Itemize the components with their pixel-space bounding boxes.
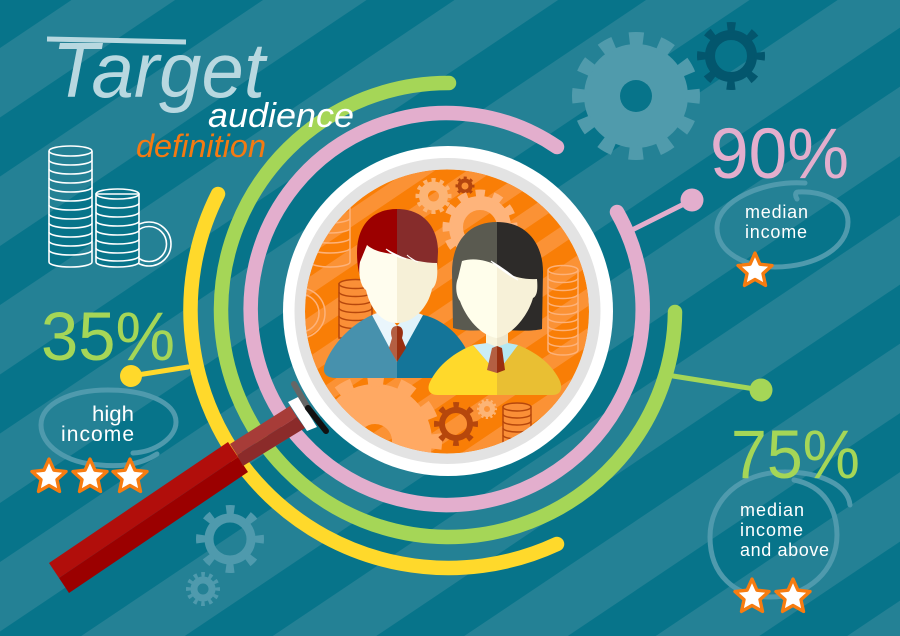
person: woman (429, 222, 561, 395)
label line 3: and above (740, 540, 829, 560)
lens scene (305, 170, 589, 454)
title word: audience: audience (208, 97, 354, 135)
percent: 90% (710, 115, 849, 194)
swirl outline (717, 183, 848, 267)
stat: 90% median income (710, 115, 849, 285)
label line 2: income (745, 222, 807, 242)
stat: 35% high income (32, 298, 176, 491)
person: man (324, 209, 466, 378)
label line 1: median (740, 500, 804, 520)
swirl outline (710, 472, 850, 597)
label line 2: income (61, 423, 134, 446)
magnifier handle (49, 384, 326, 593)
label line 1: high (92, 403, 134, 426)
title (47, 26, 354, 164)
label line 2: income (740, 520, 803, 540)
connector and arc: median income and above (221, 83, 772, 537)
magnifier lens frame (283, 146, 613, 476)
swirl outline (41, 390, 176, 466)
three stars (32, 459, 147, 491)
icon: large gear (579, 39, 693, 153)
ring arcs (120, 83, 772, 568)
connector and arc: high income (120, 194, 557, 568)
lens coin stacks (306, 208, 579, 442)
title bar stroke (47, 39, 186, 42)
star (738, 253, 772, 285)
lens gears (334, 176, 518, 452)
icon: white coin stacks (49, 146, 171, 267)
title word: definition: definition (136, 128, 266, 164)
icon: bottom gear (201, 510, 259, 568)
two stars (735, 579, 810, 611)
icon: small bottom gear (188, 574, 218, 604)
label line 1: median (745, 202, 808, 222)
connector and arc: median income (251, 113, 704, 505)
percent: 75% (731, 416, 860, 493)
percent: 35% (41, 298, 175, 375)
icon: dark gear (702, 27, 760, 85)
stat: 75% median income and above (710, 416, 860, 611)
title word: Target: Target (52, 26, 268, 114)
